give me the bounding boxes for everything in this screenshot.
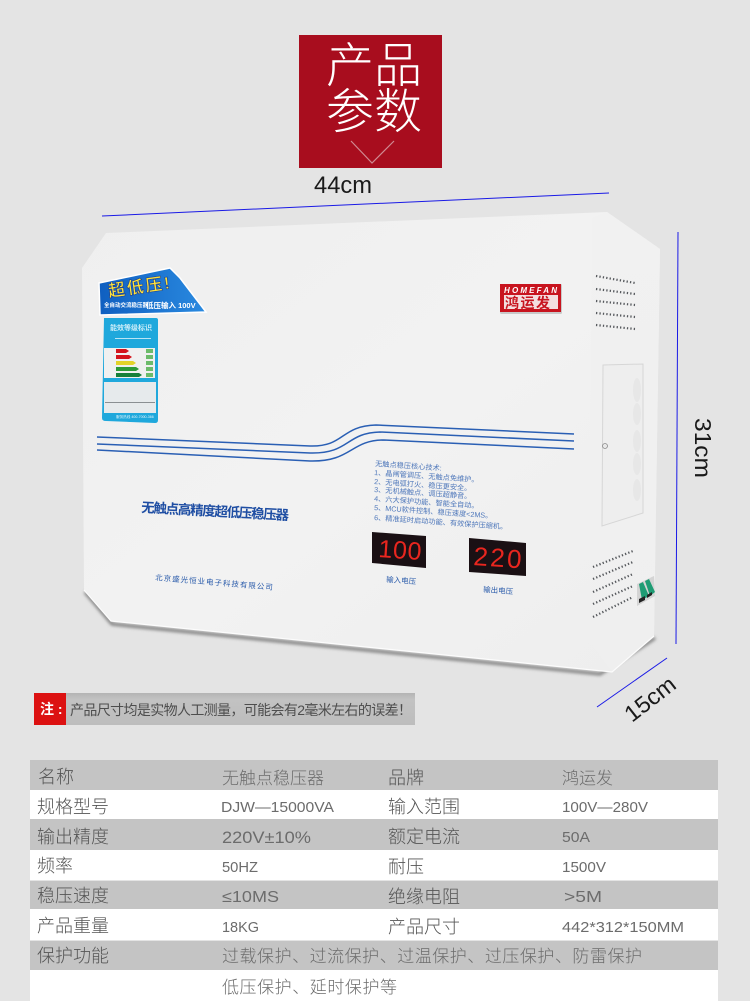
energy label: 服务热线 400-7000-366 <box>116 414 154 419</box>
core technology text <box>374 459 508 531</box>
row: weight and dimensions: 产品重量 <box>37 916 109 936</box>
sticker: ultra low voltage: 低压输入 100V <box>146 300 196 310</box>
row: output accuracy and rated current: 输出精度 <box>37 827 109 847</box>
product: voltage stabilizer <box>82 212 660 674</box>
row: regulation speed and insulation: 绝缘电阻 <box>388 887 460 907</box>
table row stripes <box>30 760 718 1001</box>
device shadow <box>85 592 655 674</box>
brand logo: Homefan <box>500 284 562 314</box>
note bar: 产品尺寸均是实物人工测量，可能会有2毫米左右的误差！ <box>70 702 412 718</box>
row: weight and dimensions: 442*312*150MM <box>562 919 684 936</box>
core technology text: 3、无机械触点、调压超静音。 <box>374 485 472 501</box>
note bar: 注 : <box>40 701 63 717</box>
core technology text: 5、MCU软件控制、稳压速度<2MS。 <box>374 503 493 520</box>
row: model and input range: 100V—280V <box>562 799 648 816</box>
dimension: height 31cm: 31cm <box>690 418 716 478</box>
row: frequency and withstand voltage: 1500V <box>562 859 606 876</box>
sticker: ultra low voltage <box>99 268 206 315</box>
title block: product parameters: 产品 <box>326 40 422 93</box>
company name: 北京盛光恒业电子科技有限公司 <box>155 572 273 592</box>
display: input voltage 100: 输入电压 <box>386 574 417 586</box>
core technology text: 6、精准延时启动功能、有效保护压缩机。 <box>374 513 508 531</box>
row: model and input range <box>37 797 648 817</box>
row: model and input range: DJW—15000VA <box>221 799 334 816</box>
row: model and input range: 规格型号 <box>37 797 109 817</box>
sticker: ultra low voltage: 超低压! <box>107 274 171 301</box>
device side panel <box>589 212 660 672</box>
title block: product parameters <box>299 35 442 168</box>
row: regulation speed and insulation <box>37 886 602 907</box>
row: weight and dimensions: 产品尺寸 <box>388 917 460 937</box>
display: output voltage 220 <box>469 538 526 596</box>
parameter table <box>30 760 718 1001</box>
row: protection functions: 保护功能 <box>37 946 109 966</box>
display: input voltage 100: 100 <box>378 535 422 566</box>
row: weight and dimensions <box>37 916 684 937</box>
device body <box>82 212 660 672</box>
display: output voltage 220: 220 <box>473 541 523 574</box>
row: output accuracy and rated current: 220V±10% <box>222 828 311 847</box>
energy label <box>102 318 158 423</box>
row: frequency and withstand voltage: 频率 <box>37 856 73 876</box>
energy label: 能效等级标识 <box>110 323 152 332</box>
dimension: depth 15cm: 15cm <box>619 671 681 727</box>
row: name and brand: 品牌 <box>388 768 424 788</box>
row: name and brand: 名称 <box>38 767 74 787</box>
row: output accuracy and rated current <box>37 827 590 847</box>
note bar <box>34 693 415 725</box>
brand logo: Homefan: 鸿运发 <box>505 295 550 311</box>
row: frequency and withstand voltage: 耐压 <box>388 857 424 877</box>
brand logo: Homefan: HOMEFAN <box>504 286 557 295</box>
core technology text: 2、无电弧打火、稳压更安全。 <box>374 477 472 493</box>
decorative blue wave lines <box>97 425 574 461</box>
row: protection functions: 低压保护、延时保护等 <box>222 978 397 997</box>
row: name and brand: 鸿运发 <box>562 769 613 788</box>
circuit breaker <box>637 576 655 606</box>
core technology text: 4、六大保护功能、智能全自动。 <box>374 494 479 510</box>
dimension: width 44cm <box>102 172 609 216</box>
row: regulation speed and insulation: 稳压速度 <box>37 886 109 906</box>
device lower edge highlight <box>84 590 654 672</box>
row: output accuracy and rated current: 50A <box>562 829 590 846</box>
row: frequency and withstand voltage <box>37 856 606 877</box>
core technology text: 无触点稳压核心技术: <box>375 459 442 473</box>
row: regulation speed and insulation: ≤10MS <box>222 889 279 906</box>
display: input voltage 100 <box>372 532 426 586</box>
display: output voltage 220: 输出电压 <box>483 584 514 596</box>
row: name and brand: 无触点稳压器 <box>222 769 324 788</box>
vents: lower <box>593 551 633 617</box>
vents: upper <box>596 276 635 329</box>
side access door <box>602 364 643 526</box>
row: frequency and withstand voltage: 50HZ <box>222 859 258 876</box>
row: regulation speed and insulation: >5M <box>564 889 602 906</box>
dimension: depth 15cm <box>597 658 681 727</box>
row: weight and dimensions: 18KG <box>222 919 259 936</box>
sticker: ultra low voltage: 全自动交流稳压器 <box>104 301 149 309</box>
dimension: width 44cm: 44cm <box>314 172 372 199</box>
product name on panel: 无触点高精度超低压稳压器 <box>141 499 290 523</box>
row: output accuracy and rated current: 额定电流 <box>388 827 460 847</box>
row: protection functions: 过载保护、过流保护、过温保护、过压保护、防雷保护 <box>222 947 642 966</box>
title block: product parameters: 参数 <box>326 86 422 139</box>
row: model and input range: 输入范围 <box>388 797 460 817</box>
row: protection functions <box>37 946 642 997</box>
row: name and brand <box>38 767 613 788</box>
core technology text: 1、晶闸管调压、无触点免维护。 <box>374 468 479 484</box>
